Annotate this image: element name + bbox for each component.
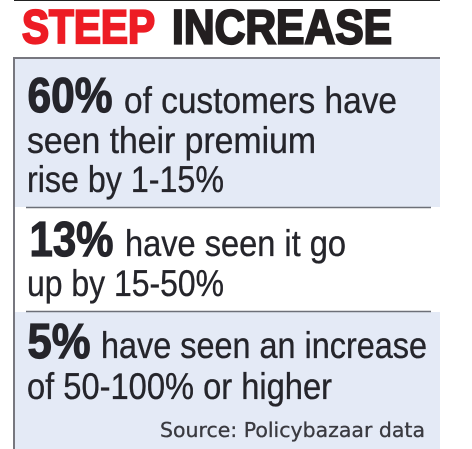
title: INCREASE: [172, 2, 392, 54]
panel: 13%: 13%: [30, 213, 114, 267]
title: [22, 0, 392, 54]
panel: 60% of customers: rise by 1-15%: [27, 159, 224, 200]
panel: 13%: have seen it go: [125, 223, 346, 264]
panel: 5%: 5%: [28, 315, 90, 369]
panel: 13%: up by 15-50%: [27, 263, 224, 304]
title: STEEP: [22, 0, 155, 53]
panel: 60% of customers: seen their premium: [27, 120, 316, 161]
panel: 5%: of 50-100% or higher: [27, 366, 332, 407]
panel: 13%: [13, 208, 440, 311]
panel: 60% of customers: [13, 57, 440, 207]
panel: 60% of customers: of customers have: [124, 80, 397, 121]
panel: 5%: [13, 312, 440, 449]
source note: Source: Policybazaar data: [160, 418, 425, 442]
top rule: [14, 0, 440, 1]
dividers: [26, 208, 431, 312]
panel frame: [14, 58, 440, 449]
panel: 5%: have seen an increase: [101, 325, 427, 366]
panel: 60% of customers: 60%: [28, 69, 112, 123]
